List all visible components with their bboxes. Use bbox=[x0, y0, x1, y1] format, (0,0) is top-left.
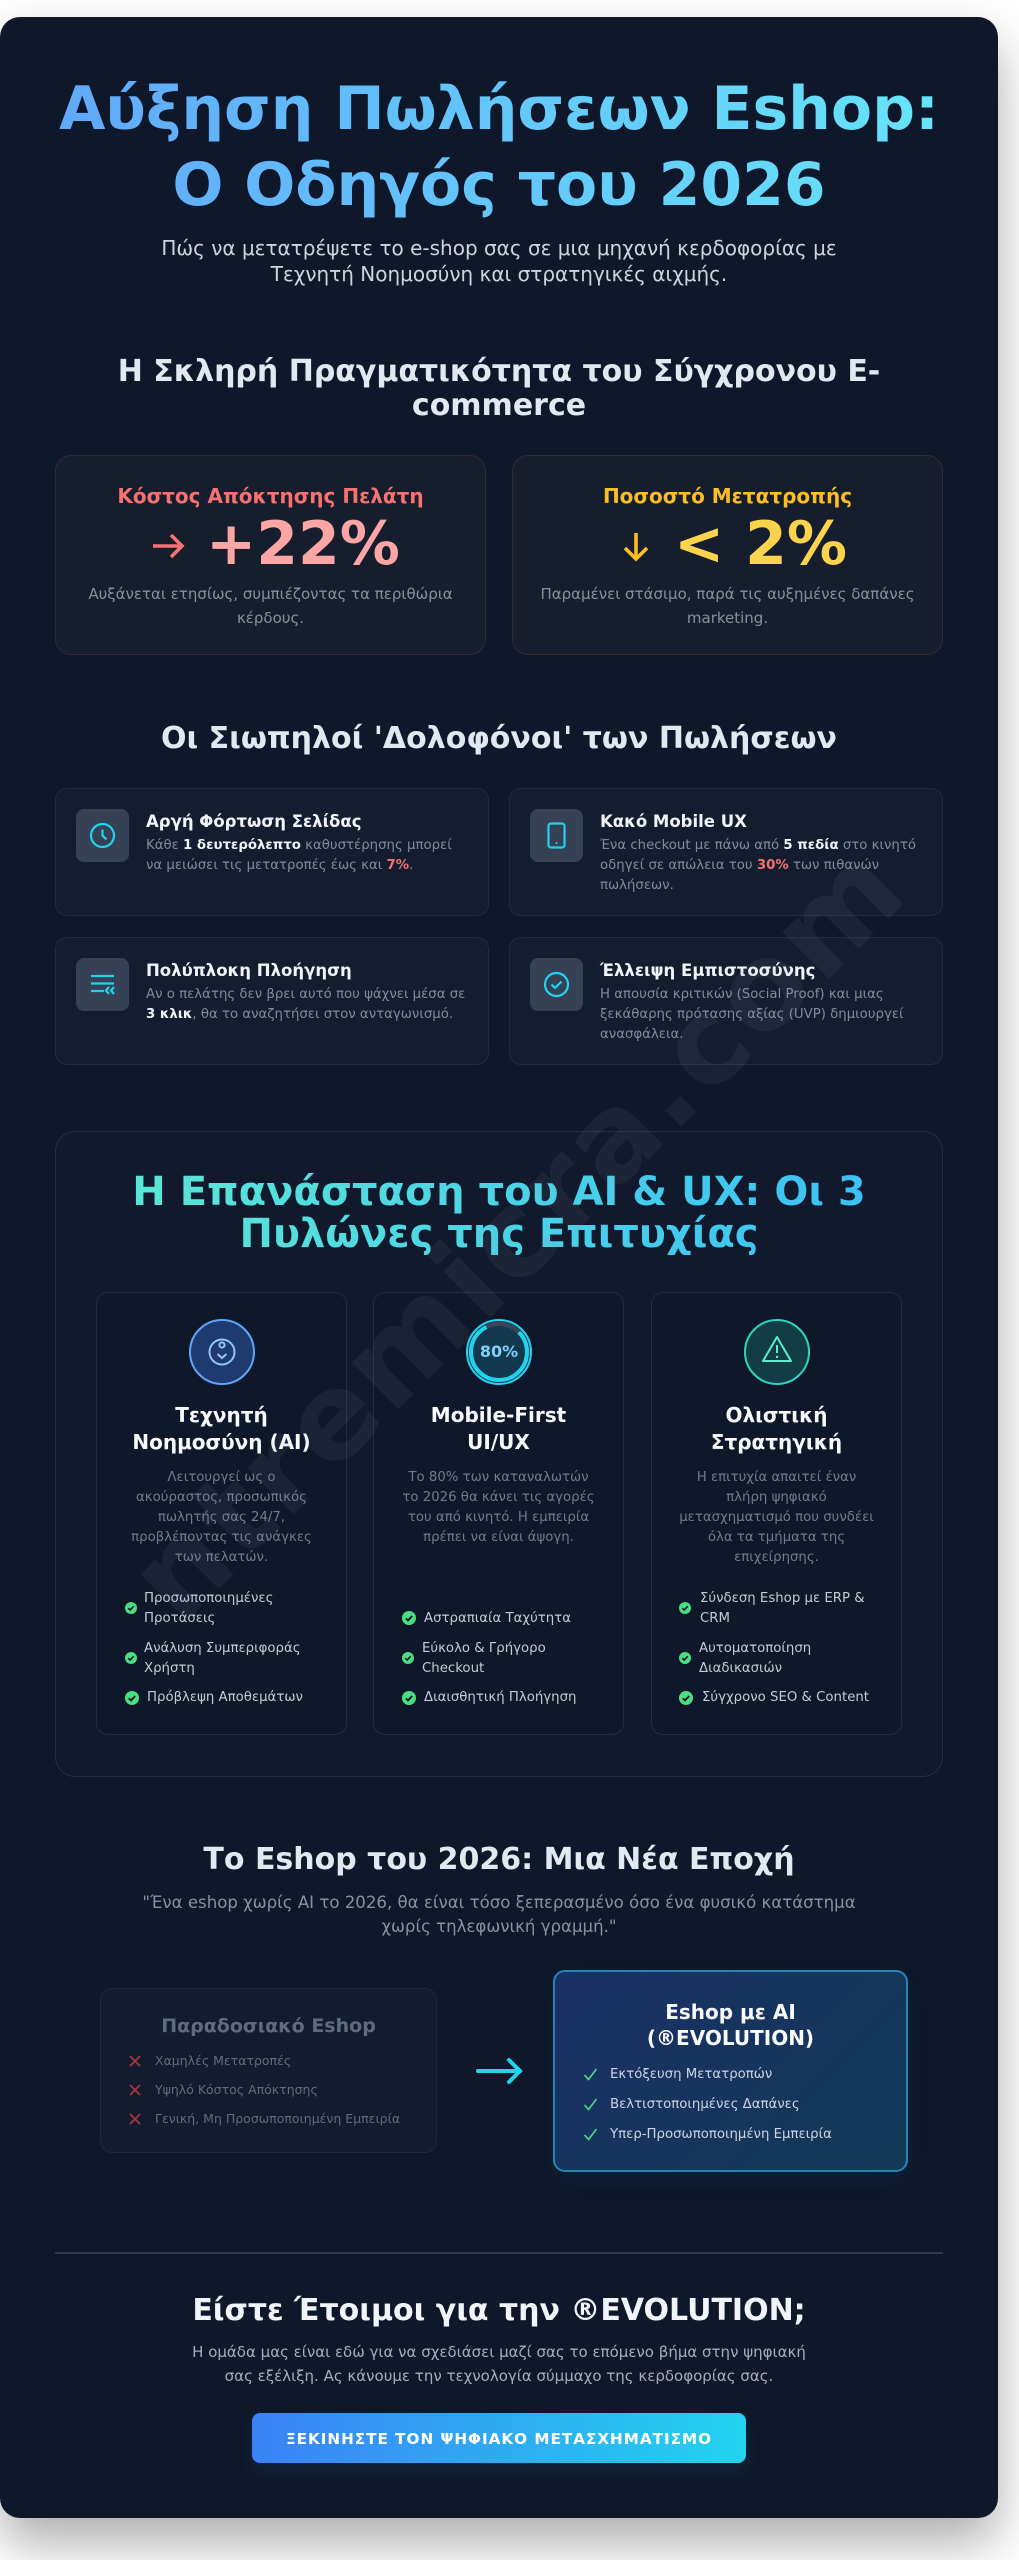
subtitle: Πώς να μετατρέψετε το e-shop σας σε μια μηχανή κερδοφορίας με bbox=[161, 236, 837, 260]
heading: three pillars: Πυλώνες της Επιτυχίας bbox=[239, 1211, 759, 1257]
stat value: +22% bbox=[206, 509, 400, 579]
list item: Χρήστη bbox=[144, 1661, 195, 1676]
stat note: κέρδους. bbox=[237, 609, 304, 627]
pillar title bbox=[711, 1403, 842, 1454]
check icon bbox=[679, 1602, 691, 1614]
stat label: Ποσοστό Μετατροπής bbox=[603, 484, 852, 508]
list item bbox=[144, 1641, 301, 1676]
pillar title: UI/UX bbox=[467, 1430, 530, 1454]
card text: να μειώσει τις μετατροπές έως και 7%. bbox=[146, 858, 413, 873]
pillar text: Η επιτυχία απαιτεί έναν bbox=[697, 1470, 856, 1485]
stat value: < 2% bbox=[674, 509, 847, 579]
heading: harsh reality: commerce bbox=[412, 388, 586, 423]
quote: χωρίς τηλεφωνική γραμμή." bbox=[381, 1917, 617, 1936]
arrow bbox=[476, 2058, 523, 2084]
panel: traditional eshop bbox=[100, 1988, 437, 2153]
card text bbox=[146, 987, 465, 1022]
stat label: Κόστος Απόκτησης Πελάτη bbox=[117, 484, 424, 508]
heading: three pillars bbox=[55, 1171, 943, 1255]
pillar: artificial intelligence bbox=[96, 1292, 347, 1735]
pillar text: μετασχηματισμό που συνδέει bbox=[679, 1510, 874, 1525]
check icon bbox=[679, 1691, 693, 1705]
old title: Παραδοσιακό Eshop bbox=[161, 2015, 376, 2037]
panel: conversion rate bbox=[512, 455, 943, 655]
check icon bbox=[679, 1652, 691, 1664]
old list item 1: Χαμηλές Μετατροπές bbox=[155, 2053, 291, 2068]
pillar text: πλήρη ψηφιακό bbox=[726, 1490, 827, 1505]
check icon bbox=[125, 1602, 137, 1614]
pillar text: όλα τα τμήματα της bbox=[708, 1530, 845, 1545]
pillar title bbox=[431, 1403, 566, 1454]
heading: harsh reality bbox=[118, 354, 880, 423]
check icon bbox=[402, 1611, 416, 1625]
panel: complex navigation bbox=[55, 937, 489, 1065]
pillar title: Mobile-First bbox=[431, 1403, 566, 1427]
card text bbox=[146, 838, 452, 873]
pillar text: των πελατών. bbox=[175, 1550, 268, 1565]
icon: 80 percent ring: 80% bbox=[480, 1342, 518, 1361]
pillar title: Ολιστική bbox=[725, 1403, 828, 1427]
heading: call to action: Είστε Έτοιμοι για την ®EVOLUTION; bbox=[192, 2293, 806, 2328]
icon: warning triangle bbox=[744, 1319, 810, 1385]
button bbox=[252, 2413, 746, 2463]
heading: silent killers: Οι Σιωπηλοί 'Δολοφόνοι' των Πωλήσεων bbox=[161, 721, 837, 756]
pillar text bbox=[402, 1470, 595, 1545]
list item: Προσωποποιημένες bbox=[144, 1591, 273, 1606]
card text: Ένα checkout με πάνω από 5 πεδία στο κινητό bbox=[600, 838, 916, 853]
new list item 3: Υπερ-Προσωποποιημένη Εμπειρία bbox=[610, 2127, 832, 2142]
stat note bbox=[88, 585, 453, 627]
icon: clock bbox=[76, 809, 129, 862]
pillar: holistic strategy bbox=[651, 1292, 902, 1735]
new list item 1: Εκτόξευση Μετατροπών bbox=[610, 2067, 772, 2082]
pillar text bbox=[131, 1470, 312, 1565]
quote bbox=[142, 1893, 856, 1936]
card title: Κακό Mobile UX bbox=[600, 812, 747, 831]
pillar text: πρέπει να είναι άψογη. bbox=[423, 1530, 574, 1545]
panel: customer acquisition cost bbox=[55, 455, 486, 655]
list item: Σύνδεση Eshop με ERP & bbox=[700, 1591, 865, 1606]
stat note: Παραμένει στάσιμο, παρά τις αυξημένες δαπάνες bbox=[540, 585, 915, 603]
pillar title: Τεχνητή bbox=[175, 1403, 268, 1427]
subtitle bbox=[161, 236, 837, 286]
panel: bad mobile UX bbox=[509, 788, 943, 916]
title: Αύξηση Πωλήσεων Eshop: bbox=[59, 74, 939, 144]
icon: right arrow bbox=[153, 534, 184, 558]
pillar text: το 2026 θα κάνει τις αγορές bbox=[402, 1490, 595, 1505]
panel: slow loading bbox=[55, 788, 489, 916]
list item: Διαισθητική Πλοήγηση bbox=[424, 1690, 576, 1705]
card text: Κάθε 1 δευτερόλεπτο καθυστέρησης μπορεί bbox=[146, 838, 452, 853]
card text: ξεκάθαρης πρότασης αξίας (UVP) δημιουργεί bbox=[600, 1007, 904, 1022]
card text bbox=[600, 838, 916, 893]
panel: eshop with AI bbox=[553, 1970, 908, 2172]
card text: ανασφάλεια. bbox=[600, 1027, 683, 1042]
pillar text: του από κινητό. Η εμπειρία bbox=[408, 1510, 589, 1525]
list item: Checkout bbox=[422, 1661, 484, 1676]
pillar text: Λειτουργεί ως ο bbox=[167, 1470, 276, 1485]
watermark: ntremicra.com bbox=[102, 817, 934, 1648]
new title: (®EVOLUTION) bbox=[647, 2026, 814, 2050]
list item: Διαδικασιών bbox=[699, 1661, 782, 1676]
list item bbox=[144, 1591, 273, 1626]
check icon bbox=[402, 1691, 416, 1705]
pillar title: Νοημοσύνη (AI) bbox=[132, 1430, 311, 1454]
button: ΞΕΚΙΝΗΣΤΕ ΤΟΝ ΨΗΦΙΑΚΟ ΜΕΤΑΣΧΗΜΑΤΙΣΜΟ bbox=[286, 2430, 712, 2448]
pillar text bbox=[679, 1470, 874, 1565]
new list item 2: Βελτιστοποιημένες Δαπάνες bbox=[610, 2097, 800, 2112]
list item bbox=[699, 1641, 811, 1676]
check icon bbox=[402, 1652, 414, 1664]
panel: AI and UX revolution bbox=[55, 1131, 943, 1777]
icon: 80 percent ring bbox=[466, 1319, 532, 1385]
list item: Αστραπιαία Ταχύτητα bbox=[424, 1611, 571, 1626]
old list item 2: Υψηλό Κόστος Απόκτησης bbox=[155, 2082, 318, 2097]
icon: phone bbox=[530, 809, 583, 862]
pillar text: επιχείρησης. bbox=[734, 1550, 819, 1565]
icon: down arrow bbox=[624, 533, 648, 562]
card title: Πολύπλοκη Πλοήγηση bbox=[146, 961, 352, 980]
stat note: Αυξάνεται ετησίως, συμπιέζοντας τα περιθώρια bbox=[88, 585, 453, 603]
pillar text: πωλητής σας 24/7, bbox=[158, 1510, 285, 1525]
icon: check badge bbox=[530, 958, 583, 1011]
new title: Eshop με AI bbox=[665, 2000, 796, 2024]
heading: eshop of 2026: Το Eshop του 2026: Μια Νέα Εποχή bbox=[203, 1842, 795, 1877]
pillar text: προβλέποντας τις ανάγκες bbox=[131, 1530, 312, 1545]
card text: Η απουσία κριτικών (Social Proof) και μιας bbox=[600, 987, 884, 1002]
list item: Ανάλυση Συμπεριφοράς bbox=[144, 1641, 301, 1656]
list item: Πρόβλεψη Αποθεμάτων bbox=[147, 1690, 303, 1705]
pillar: mobile first bbox=[373, 1292, 624, 1735]
list item bbox=[422, 1641, 546, 1676]
list item: Προτάσεις bbox=[144, 1611, 215, 1626]
call to action text: Η ομάδα μας είναι εδώ για να σχεδιάσει μαζί σας το επόμενο βήμα στην ψηφιακή bbox=[192, 2343, 806, 2361]
pillar text: Το 80% των καταναλωτών bbox=[408, 1470, 589, 1485]
quote: "Ένα eshop χωρίς AI το 2026, θα είναι τόσο ξεπερασμένο όσο ένα φυσικό κατάστημα bbox=[142, 1893, 856, 1912]
list item: Εύκολο & Γρήγορο bbox=[422, 1641, 546, 1656]
list item: Αυτοματοποίηση bbox=[699, 1641, 811, 1656]
list item bbox=[700, 1591, 865, 1626]
icon: navigation lines bbox=[76, 958, 129, 1011]
old list item 3: Γενική, Μη Προσωποποιημένη Εμπειρία bbox=[155, 2111, 400, 2126]
heading: three pillars: Η Επανάσταση του AI & UX: Οι 3 bbox=[132, 1169, 866, 1215]
call to action text bbox=[192, 2343, 806, 2385]
panel: lack of trust bbox=[509, 937, 943, 1065]
check icon bbox=[125, 1652, 137, 1664]
check icon bbox=[125, 1691, 139, 1705]
stat note: marketing. bbox=[687, 609, 768, 627]
card text: οδηγεί σε απώλεια του 30% των πιθανών bbox=[600, 858, 879, 873]
title: Ο Οδηγός του 2026 bbox=[172, 150, 826, 220]
call to action text: σας εξέλιξη. Ας κάνουμε την τεχνολογία σύμμαχο της κερδοφορίας σας. bbox=[225, 2367, 773, 2385]
new title bbox=[647, 2000, 814, 2050]
card text: Αν ο πελάτης δεν βρει αυτό που ψάχνει μέσα σε bbox=[146, 987, 465, 1002]
card text: πωλήσεων. bbox=[600, 878, 674, 893]
pillar title bbox=[132, 1403, 311, 1454]
card title: Αργή Φόρτωση Σελίδας bbox=[146, 812, 361, 831]
pillar text: ακούραστος, προσωπικός bbox=[136, 1490, 307, 1505]
icon: AI circle bbox=[189, 1319, 255, 1385]
card title: Έλλειψη Εμπιστοσύνης bbox=[600, 961, 815, 980]
pillar title: Στρατηγική bbox=[711, 1430, 842, 1454]
card text: 3 κλικ, θα το αναζητήσει στον ανταγωνισμό. bbox=[146, 1007, 453, 1022]
list item: CRM bbox=[700, 1611, 730, 1626]
subtitle: Τεχνητή Νοημοσύνη και στρατηγικές αιχμής. bbox=[271, 262, 727, 286]
list item: Σύγχρονο SEO & Content bbox=[702, 1690, 869, 1705]
heading: harsh reality: Η Σκληρή Πραγματικότητα του Σύγχρονου E- bbox=[118, 354, 880, 389]
card text bbox=[600, 987, 904, 1042]
title bbox=[0, 72, 998, 223]
stat note bbox=[540, 585, 915, 627]
